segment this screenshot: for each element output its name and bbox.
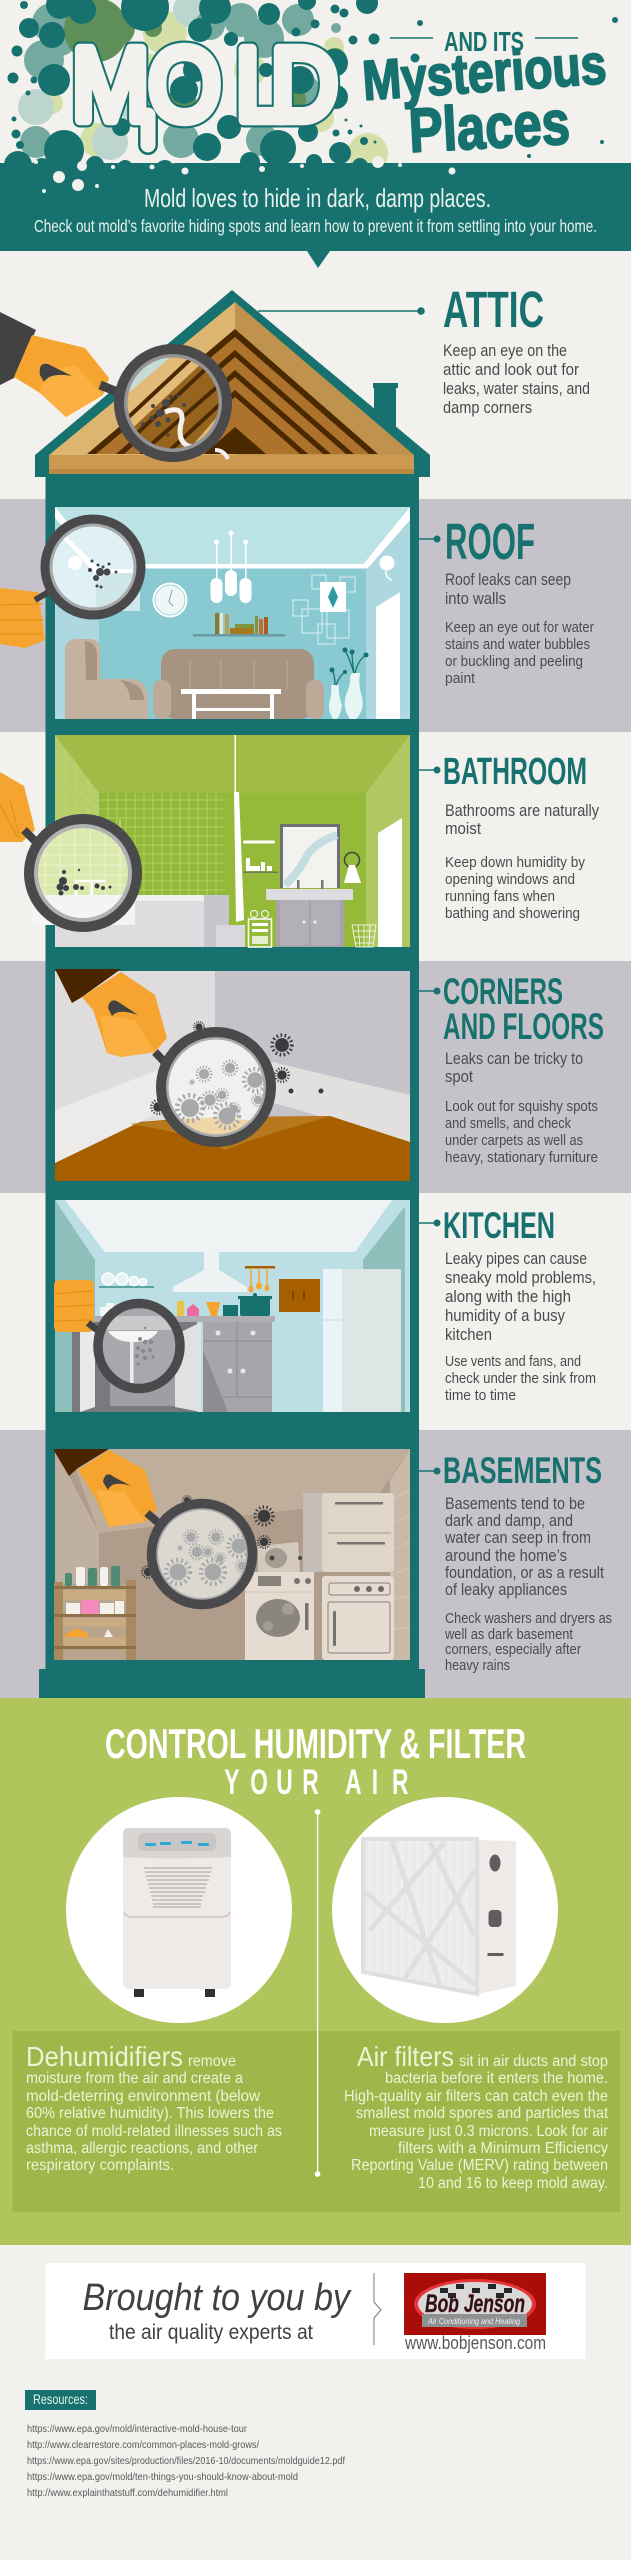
attic interior: [49, 302, 414, 474]
magnifier and hand: roof: [0, 519, 141, 648]
kitchen text: Leaky pipes can cause: [445, 1250, 587, 1268]
corners text: [445, 1050, 598, 1166]
panel: control humidity and filter: [0, 1698, 631, 2245]
title: and its: AND ITS: [444, 26, 524, 57]
corners text: Leaks can be tricky to: [445, 1050, 583, 1068]
dehumidifiers text: respiratory complaints.: [26, 2157, 174, 2174]
room: basement: [53, 1449, 410, 1660]
air filters text: measure just 0.3 microns. Look for air: [369, 2123, 608, 2140]
storage shelf: [54, 1566, 136, 1660]
sponsor box: Brought to you by: [82, 2277, 352, 2319]
roof text: Roof leaks can seep: [445, 571, 571, 589]
bathroom text: opening windows and: [445, 871, 575, 888]
corners text: and smells, and check: [445, 1115, 571, 1132]
basements text: heavy rains: [445, 1657, 510, 1674]
kitchen label: [419, 1205, 555, 1246]
vases: [329, 648, 368, 719]
air filters text: High-quality air filters can catch even the: [344, 2088, 608, 2105]
shower curtain: [234, 735, 244, 922]
resources list: http://www.clearrestore.com/common-places-mold-grows/: [27, 2439, 259, 2451]
heading: [105, 1720, 526, 1802]
kitchen text: Use vents and fans, and: [445, 1353, 581, 1370]
range hood: [173, 1252, 247, 1292]
corners text: spot: [445, 1068, 473, 1086]
dehumidifiers text: remove: [188, 2053, 236, 2070]
dehumidifiers text: chance of mold-related illnesses such as: [26, 2123, 282, 2140]
resources list: https://www.epa.gov/sites/production/files/2016-10/documents/moldguide12.pdf: [27, 2455, 345, 2467]
armchair: [65, 639, 148, 719]
upper cabinet: [303, 1493, 394, 1572]
room: living room: [55, 507, 410, 719]
basements text: well as dark basement: [444, 1626, 574, 1643]
wall cabinet: [279, 1279, 320, 1312]
title: MOLD: MOLD: [72, 26, 338, 142]
attic text: leaks, water stains, and: [443, 380, 590, 398]
bathroom text: Keep down humidity by: [445, 854, 585, 871]
basements text: around the home’s: [445, 1547, 567, 1565]
corners label: CORNERS: [443, 971, 563, 1012]
basements text: of leaky appliances: [445, 1581, 567, 1599]
counter items: [100, 1293, 272, 1327]
magnifier and hand: kitchen: [54, 1280, 180, 1389]
laundry basket: [352, 925, 376, 947]
cart: [248, 910, 272, 947]
sponsor box: www.bobjenson.com: [404, 2332, 546, 2353]
wall pictures: [293, 575, 355, 644]
air filters text: [344, 2041, 609, 2192]
basements text: [444, 1495, 612, 1674]
corners text: heavy, stationary furniture: [445, 1149, 598, 1166]
hand: [55, 969, 167, 1057]
logo: Air Conditioning and Heating: [427, 2316, 520, 2326]
roof text: stains and water bubbles: [445, 636, 590, 653]
room: bathroom: [55, 735, 410, 947]
roof label: ROOF: [445, 513, 535, 570]
attic label: ATTIC: [443, 281, 544, 338]
bathroom text: Bathrooms are naturally: [445, 802, 600, 820]
title: mysterious places: Places: [407, 89, 572, 166]
resources list: https://www.epa.gov/mold/interactive-mold-house-tour: [27, 2423, 247, 2435]
attic text: attic and look out for: [443, 361, 579, 379]
kitchen text: kitchen: [445, 1326, 492, 1344]
magnifier and hand: bathroom: [0, 772, 137, 927]
bathroom text: [445, 802, 600, 922]
cabinets: [72, 1316, 275, 1412]
dehumidifiers text: 60% relative humidity). This lowers the: [26, 2105, 274, 2122]
text backing panel: [12, 2031, 620, 2212]
logo: [404, 2273, 546, 2335]
icon: dehumidifier: [66, 1797, 292, 2023]
sponsor box: [46, 2263, 586, 2359]
magnifier: [152, 1504, 252, 1604]
air filters text: Air filters: [357, 2041, 454, 2072]
mold spots: [151, 1022, 324, 1114]
resources list: http://www.explainthatstuff.com/dehumidifier.html: [27, 2487, 228, 2499]
magnifier and hand: attic: [0, 312, 240, 460]
icon: air filter: [332, 1797, 558, 2023]
roof text: Keep an eye out for water: [445, 619, 594, 636]
room: kitchen: [55, 1200, 410, 1412]
resources list: https://www.epa.gov/mold/ten-things-you-should-know-about-mold: [27, 2471, 298, 2483]
title: mysterious places: [360, 32, 608, 166]
basements text: Basements tend to be: [445, 1495, 585, 1513]
stove: [322, 1576, 394, 1660]
bathtub: [55, 895, 245, 947]
house structure: [35, 290, 430, 1698]
vanity: [266, 880, 353, 947]
washer: [245, 1572, 314, 1660]
mirror: [280, 824, 340, 888]
tile wall: [55, 750, 225, 905]
dryer: [258, 1542, 302, 1572]
dehumidifiers text: [26, 2041, 282, 2174]
kitchen label: KITCHEN: [443, 1205, 555, 1246]
grey section bands: [0, 499, 631, 1698]
air filters text: filters with a Minimum Efficiency: [398, 2140, 608, 2157]
roof text: paint: [445, 670, 476, 687]
bathroom label: [419, 751, 587, 793]
coffee table: [181, 689, 281, 719]
dehumidifiers text: moisture from the air and create a: [26, 2070, 243, 2087]
air filters text: smallest mold spores and particles that: [356, 2105, 609, 2122]
wall clock: [152, 582, 188, 618]
resources heading: Resources:: [33, 2392, 88, 2407]
magnifier: [161, 1032, 271, 1142]
kitchen text: check under the sink from: [445, 1370, 596, 1387]
banner: Mold loves to hide in dark, damp places.: [144, 183, 491, 213]
plates shelf: [99, 1273, 154, 1288]
kitchen text: [445, 1250, 596, 1404]
attic text: [443, 342, 590, 417]
pendant lights: [210, 530, 252, 603]
basements text: corners, especially after: [445, 1641, 581, 1658]
corners text: Look out for squishy spots: [445, 1098, 598, 1115]
basements text: water can seep in from: [444, 1529, 591, 1547]
resources heading: [25, 2390, 96, 2410]
kitchen text: humidity of a busy: [445, 1307, 566, 1325]
towel: [344, 852, 361, 883]
bathroom text: moist: [445, 820, 481, 838]
bookshelf: [193, 613, 285, 636]
bathroom text: bathing and showering: [445, 905, 580, 922]
divider: [315, 1809, 320, 2177]
hand: [53, 1449, 157, 1527]
heading: YOUR AIR: [224, 1763, 408, 1802]
title: MOLD: MOLD: [72, 26, 338, 142]
attic text: Keep an eye on the: [443, 342, 567, 360]
shelf and towel bar: [243, 840, 278, 873]
roof text: [445, 571, 594, 687]
air filters text: bacteria before it enters the home.: [385, 2070, 608, 2087]
utensils: [245, 1266, 275, 1292]
fridge: [323, 1269, 401, 1412]
resources list: [27, 2423, 345, 2499]
dehumidifiers text: Dehumidifiers: [26, 2041, 183, 2072]
roof label: [419, 513, 535, 570]
room: corners and floors: [55, 969, 410, 1181]
roof text: into walls: [445, 590, 506, 608]
banner: [0, 155, 631, 268]
sponsor box: the air quality experts at: [109, 2321, 313, 2344]
corners text: under carpets as well as: [445, 1132, 583, 1149]
air filters text: 10 and 16 to keep mold away.: [418, 2175, 608, 2192]
air filters text: sit in air ducts and stop: [459, 2053, 608, 2070]
kitchen text: along with the high: [445, 1288, 571, 1306]
attic label: [258, 281, 544, 338]
kitchen text: sneaky mold problems,: [445, 1269, 596, 1287]
dehumidifiers text: mold-deterring environment (below: [26, 2088, 261, 2105]
dehumidifiers text: asthma, allergic reactions, and other: [26, 2140, 258, 2157]
kitchen text: time to time: [445, 1387, 516, 1404]
roof text: or buckling and peeling: [445, 653, 583, 670]
corners label: [419, 971, 604, 1047]
mold splatter background: [4, 0, 618, 180]
air filters text: Reporting Value (MERV) rating between: [351, 2157, 608, 2174]
sofa: [153, 649, 324, 719]
bathroom text: running fans when: [445, 888, 555, 905]
basements text: foundation, or as a result: [445, 1564, 604, 1582]
mold spots: [142, 1496, 273, 1578]
basements text: dark and damp, and: [445, 1512, 573, 1530]
attic text: damp corners: [443, 399, 532, 417]
logo: Bob Jenson: [425, 2290, 525, 2318]
